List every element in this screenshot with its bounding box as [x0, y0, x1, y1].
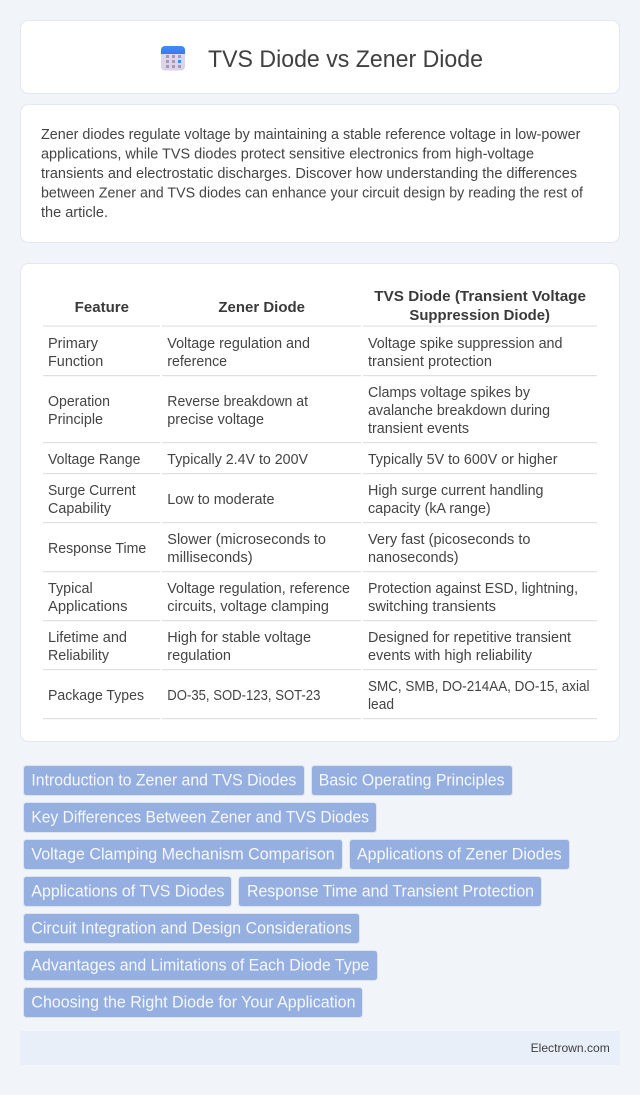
row: operation principle: [48, 385, 550, 437]
row: package types: lead: [368, 697, 394, 713]
row: voltage range: Voltage Range: [48, 452, 140, 468]
panel: introduction: [20, 104, 620, 242]
row: surge current capability: High surge current handling: [368, 483, 544, 499]
row: primary function: [48, 336, 562, 370]
row: typical applications: Protection against ESD, lightning,: [368, 581, 578, 597]
row: surge current capability: capacity (kA range): [368, 501, 491, 517]
row: surge current capability: [48, 483, 544, 517]
row: lifetime and reliability: Lifetime and: [48, 630, 127, 646]
table header row: Suppression Diode): [409, 307, 550, 324]
row: typical applications: circuits, voltage clamping: [167, 599, 329, 615]
row: lifetime and reliability: Reliability: [48, 648, 110, 664]
footer: [20, 1031, 620, 1065]
row: response time: milliseconds): [167, 550, 253, 566]
row: surge current capability: Low to moderate: [167, 492, 274, 508]
row: voltage range: Typically 2.4V to 200V: [167, 452, 308, 468]
row: operation principle: Clamps voltage spikes by: [368, 385, 531, 401]
tag: circuit integration: Circuit Integration and Design Considerations: [31, 920, 352, 938]
row: lifetime and reliability: High for stable voltage: [167, 630, 311, 646]
row: primary function: reference: [167, 354, 227, 370]
table header row: TVS Diode (Transient Voltage: [374, 288, 586, 305]
intro text: [41, 127, 584, 221]
row: response time: nanoseconds): [368, 550, 459, 566]
row: typical applications: Typical: [48, 581, 93, 597]
header panel: [20, 20, 620, 94]
tag: choosing: Choosing the Right Diode for Your Application: [31, 994, 356, 1012]
row: typical applications: Applications: [48, 599, 128, 615]
row: lifetime and reliability: Designed for repetitive transient: [368, 630, 571, 646]
row: lifetime and reliability: [48, 630, 571, 664]
row: package types: [48, 679, 590, 713]
tag: clamping comparison: [24, 840, 342, 870]
tag: zener applications: Applications of Zener Diodes: [357, 846, 562, 864]
tag: clamping comparison: Voltage Clamping Mechanism Comparison: [31, 846, 335, 864]
row: primary function: Voltage regulation and: [167, 336, 310, 352]
row: typical applications: Voltage regulation, reference: [167, 581, 350, 597]
table header row: Feature: [75, 299, 129, 316]
row: package types: Package Types: [48, 688, 144, 704]
row: lifetime and reliability: events with high reliability: [368, 648, 533, 664]
row: primary function: Primary: [48, 336, 99, 352]
row: surge current capability: Capability: [48, 501, 112, 517]
intro text: Zener diodes regulate voltage by maintaining a stable reference voltage in low-power: [41, 127, 581, 143]
row: operation principle: Operation: [48, 394, 110, 410]
footer credit: Electrown.com: [531, 1041, 610, 1055]
row: typical applications: [48, 581, 578, 615]
tag: introduction: Introduction to Zener and TVS Diodes: [31, 772, 296, 790]
row: primary function: transient protection: [368, 354, 492, 370]
row: operation principle: precise voltage: [167, 412, 264, 428]
row: response time: Response Time: [48, 541, 146, 557]
tag: response time: Response Time and Transient Protection: [247, 882, 534, 900]
row: primary function: Voltage spike suppression and: [368, 336, 562, 352]
tag: key differences: [24, 802, 376, 832]
row: operation principle: Principle: [48, 412, 103, 428]
row: primary function: Function: [48, 354, 103, 370]
icon: calendar grid: [161, 46, 185, 70]
tag: key differences: Key Differences Between Zener and TVS Diodes: [31, 808, 369, 826]
tag: circuit integration: [24, 914, 360, 944]
tag: advantages: Advantages and Limitations of Each Diode Type: [31, 956, 369, 974]
row: operation principle: avalanche breakdown during: [368, 403, 550, 419]
intro text: between Zener and TVS diodes can enhance your circuit design by reading the rest of: [41, 186, 584, 202]
tag: choosing: [24, 988, 362, 1018]
row: voltage range: Typically 5V to 600V or higher: [368, 452, 558, 468]
table header row: Zener Diode: [218, 299, 305, 316]
row: typical applications: switching transients: [368, 599, 496, 615]
tag: tvs applications: Applications of TVS Diodes: [31, 882, 225, 900]
tag: basic principles: Basic Operating Principles: [319, 772, 504, 790]
row: package types: SMC, SMB, DO-214AA, DO-15, axial: [368, 679, 590, 695]
row: surge current capability: Surge Current: [48, 483, 136, 499]
panel: topic tags: [24, 766, 570, 1018]
tag: response time: [238, 876, 542, 906]
tag: advantages: [24, 950, 378, 980]
row: response time: Very fast (picoseconds to: [368, 532, 530, 548]
intro text: transients and electrostatic discharges. Discover how understanding the differences: [41, 166, 577, 182]
tag: tvs applications: [24, 876, 232, 906]
row: response time: [48, 532, 530, 566]
row: voltage range: [48, 452, 558, 468]
tag: zener applications: [350, 840, 570, 870]
table header row: [75, 288, 586, 324]
row: package types: DO-35, SOD-123, SOT-23: [167, 688, 320, 704]
tag: basic principles: [312, 766, 512, 796]
row: operation principle: Reverse breakdown at: [167, 394, 308, 410]
intro text: applications, while TVS diodes protect sensitive electronics from high-voltage: [41, 146, 534, 162]
row: lifetime and reliability: regulation: [167, 648, 231, 664]
row: operation principle: transient events: [368, 421, 469, 437]
title: TVS Diode vs Zener Diode: [208, 46, 483, 73]
intro text: the article.: [41, 205, 108, 221]
panel: comparison table: [20, 264, 620, 742]
row: response time: Slower (microseconds to: [167, 532, 326, 548]
tag: introduction: [24, 766, 304, 796]
